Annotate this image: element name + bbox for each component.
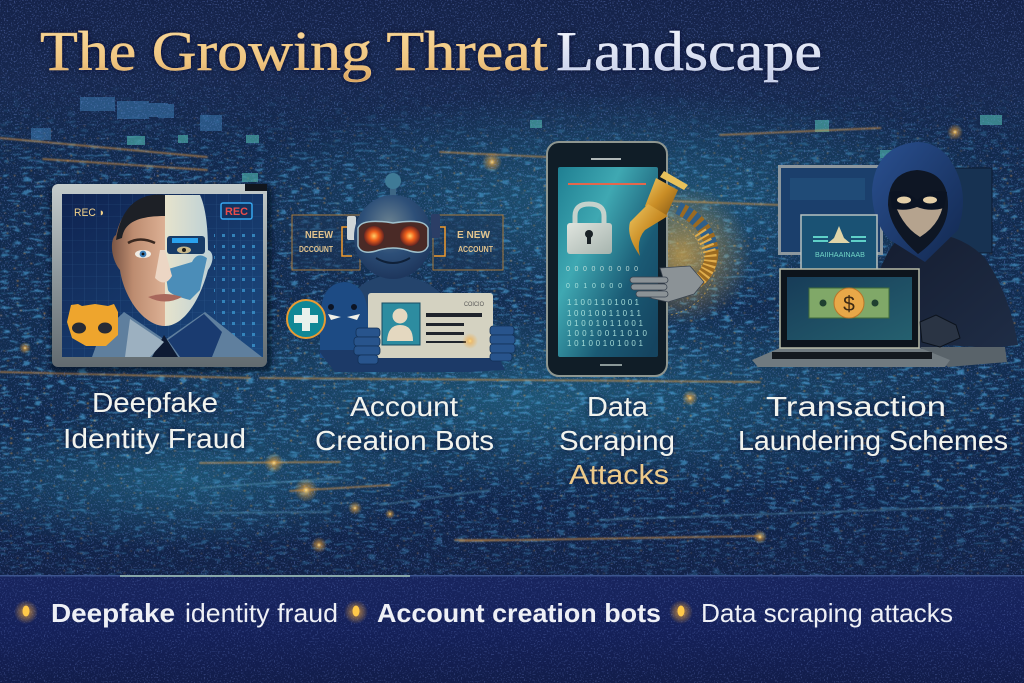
sign: new account right: ACCOUNT — [458, 245, 493, 254]
label: deepfake identity fraud: Identity Fraud — [63, 423, 246, 454]
back monitor — [778, 165, 883, 255]
sign: new account left: DCCOUNT — [299, 245, 333, 254]
label: account creation bots: Account — [350, 391, 458, 422]
text: binary digits: 0 1 0 0 1 0 1 1 0 0 1 — [567, 319, 644, 328]
robot antenna — [385, 173, 401, 198]
label: data scraping attacks: Scraping — [559, 425, 675, 456]
icon: golden mask — [67, 304, 118, 346]
badge: REC red — [221, 203, 252, 219]
lower body — [318, 350, 505, 372]
bullet: deepfake: Deepfake — [51, 598, 175, 628]
icon: padlock — [567, 204, 612, 254]
laptop — [752, 269, 1007, 367]
label: transaction laundering schemes: Laundering Schemes — [738, 425, 1008, 456]
sign: new account right: E NEW — [457, 230, 491, 241]
hacker hood and mask — [872, 142, 963, 262]
icon: banknote and coin: $ — [843, 293, 855, 316]
panel: phone data scraping — [547, 142, 752, 376]
suit and shoulders — [92, 312, 262, 357]
hacker jacket — [880, 232, 1018, 350]
middle screen: BAIIHAAINAAB — [815, 252, 865, 259]
face split human and cyber — [112, 195, 212, 326]
middle screen — [801, 215, 877, 271]
icon: golden robotic arm — [629, 171, 712, 302]
bullet: account bots: Account creation bots — [377, 598, 661, 628]
sign: new account left: NEEW — [305, 230, 334, 241]
text: binary digits: 1 0 0 1 0 0 1 1 0 1 0 — [567, 329, 648, 338]
label: data scraping attacks: Attacks — [569, 459, 669, 490]
label: account creation bots — [315, 391, 494, 456]
label: deepfake identity fraud — [63, 387, 246, 454]
gloved hand — [920, 315, 960, 347]
badge: REC red: REC — [225, 206, 248, 218]
label: data scraping attacks — [559, 391, 675, 490]
text: binary digits: 0 0 0 0 0 0 0 0 0 — [566, 266, 638, 273]
bullet: deepfake: identity fraud — [185, 598, 338, 628]
panel: deepfake monitor — [50, 184, 272, 372]
id card: COICIO — [464, 302, 484, 308]
bullet list — [14, 598, 953, 628]
text: binary digits: 1 0 0 1 0 0 1 1 0 1 1 — [567, 309, 642, 318]
text: binary digits — [566, 266, 648, 348]
bullet: data scraping: Data scraping attacks — [701, 598, 953, 628]
icon: banknote and coin — [809, 288, 889, 318]
text: binary digits: 1 1 0 0 1 1 0 1 0 0 1 — [567, 298, 640, 307]
id card — [368, 293, 493, 358]
robot head — [347, 195, 440, 279]
label: transaction laundering schemes — [738, 391, 1008, 456]
panel: hacker with laptop — [752, 142, 1018, 367]
plus badge — [287, 300, 325, 338]
text: REC label left: REC ◗ — [74, 207, 105, 219]
label: data scraping attacks: Data — [587, 391, 648, 422]
sign: new account right — [433, 215, 503, 270]
small blue bot — [320, 282, 368, 358]
footer band — [0, 575, 1024, 683]
label: transaction laundering schemes: Transaction — [766, 391, 946, 422]
text: binary digits: 1 0 1 0 0 1 0 1 0 0 1 — [567, 339, 644, 348]
title: Landscape — [556, 21, 822, 83]
sign: new account left — [292, 215, 360, 270]
robotic gray hand — [630, 266, 704, 302]
title — [40, 21, 822, 83]
panel: account creation bot — [287, 173, 515, 372]
label: deepfake identity fraud: Deepfake — [92, 387, 218, 418]
title: The Growing Threat — [40, 21, 548, 83]
robot torso — [350, 274, 447, 372]
label: account creation bots: Creation Bots — [315, 425, 494, 456]
text: binary digits: 0 0 1 0 0 0 0 — [566, 283, 622, 290]
robot hands — [354, 326, 515, 364]
bullet: deepfake — [14, 598, 338, 628]
right monitor — [950, 168, 992, 253]
